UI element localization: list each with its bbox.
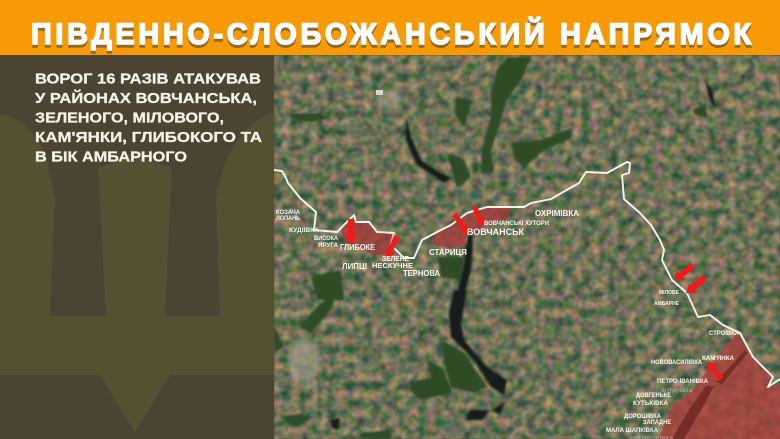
- map labels: КОЗАЧА: [276, 210, 301, 216]
- map labels: СТАРИЦЯ: [429, 248, 467, 257]
- arrow: Kamianka: [707, 361, 724, 381]
- rivers and reservoirs: [330, 80, 716, 430]
- summary text: В БІК АМБАРНОГО: [35, 150, 187, 166]
- map labels: ВОВЧАНСЬК: [467, 227, 524, 238]
- map labels: КУДІЇВКА: [289, 227, 320, 234]
- map labels: КУТЬКІВКА: [633, 401, 669, 407]
- icon: trident watermark: [0, 113, 274, 432]
- map labels: КАМ'ЯНКА: [702, 356, 735, 362]
- occupied zone: Vovchansk: [431, 207, 512, 248]
- title: ПІВДЕННО-СЛОБОЖАНСЬКИЙ НАПРЯМОК: [31, 16, 751, 51]
- map labels: МІЛОВЕ: [659, 290, 679, 296]
- map labels: ПЕТРО-ІВАНІВКА: [657, 379, 709, 385]
- satellite map: [274, 55, 780, 439]
- map labels: ЛИПЦІ: [342, 262, 367, 271]
- map labels: ВИСОКА: [314, 236, 339, 242]
- map labels: ЗЕЛЕНЕ: [382, 256, 409, 263]
- town centre: [376, 90, 383, 95]
- map labels: НОВОВАСИЛІВКА: [651, 360, 703, 366]
- arrow: Milove: [674, 263, 695, 280]
- arrow: Zelene: [385, 235, 400, 258]
- map labels: ДОРОШІВКА: [624, 414, 662, 420]
- map labels: ТЕРНОВА: [403, 269, 440, 278]
- arrow: Hlyboke: [344, 219, 358, 244]
- map labels: МАЛА ШАПКІВКА: [606, 428, 659, 434]
- front line: [274, 162, 780, 387]
- map labels: ЗАПАДНЕ: [643, 420, 671, 426]
- map labels: АМБАРНЕ: [654, 301, 679, 307]
- map labels: ОХРІМІВКА: [535, 209, 579, 218]
- map labels: ГЛИБОКЕ: [340, 243, 376, 252]
- map labels: [276, 209, 740, 439]
- occupied zone: Hlyboke: [341, 220, 394, 255]
- summary text: У РАЙОНАХ ВОВЧАНСЬКА,: [35, 89, 257, 107]
- map labels: ВОВЧАНСЬКІ ХУТОРИ: [484, 221, 549, 227]
- summary text: [35, 72, 263, 166]
- map labels: НЕСКУЧНЕ: [372, 261, 413, 270]
- map labels: ДОВГЕНЬКЕ: [636, 393, 671, 399]
- arrow: Vovchansk north: [472, 206, 485, 227]
- summary text: ВОРОГ 16 РАЗІВ АТАКУВАВ: [35, 72, 261, 88]
- arrow: Ambarne: [686, 275, 707, 293]
- map labels: ЛОПАНЬ: [276, 216, 301, 222]
- summary text: ЗЕЛЕНОГО, МІЛОВОГО,: [35, 110, 224, 126]
- left panel background: [0, 55, 274, 439]
- forests: [274, 57, 708, 439]
- map labels: СТРОЇВКА: [709, 330, 740, 337]
- map labels: ЯРУГА: [318, 243, 339, 249]
- summary text: КАМ'ЯНКИ, ГЛИБОКОГО ТА: [35, 130, 263, 146]
- map labels: Бугрувата: [662, 388, 693, 394]
- title: ПІВДЕННО-СЛОБОЖАНСЬКИЙ НАПРЯМОК: [31, 19, 751, 54]
- header bar: [0, 0, 780, 55]
- towns: [288, 90, 402, 383]
- occupied zone: Kamianka: [658, 333, 780, 439]
- dark strip in occupied zone: [672, 350, 748, 439]
- arrow: Vovchansk west: [452, 213, 469, 236]
